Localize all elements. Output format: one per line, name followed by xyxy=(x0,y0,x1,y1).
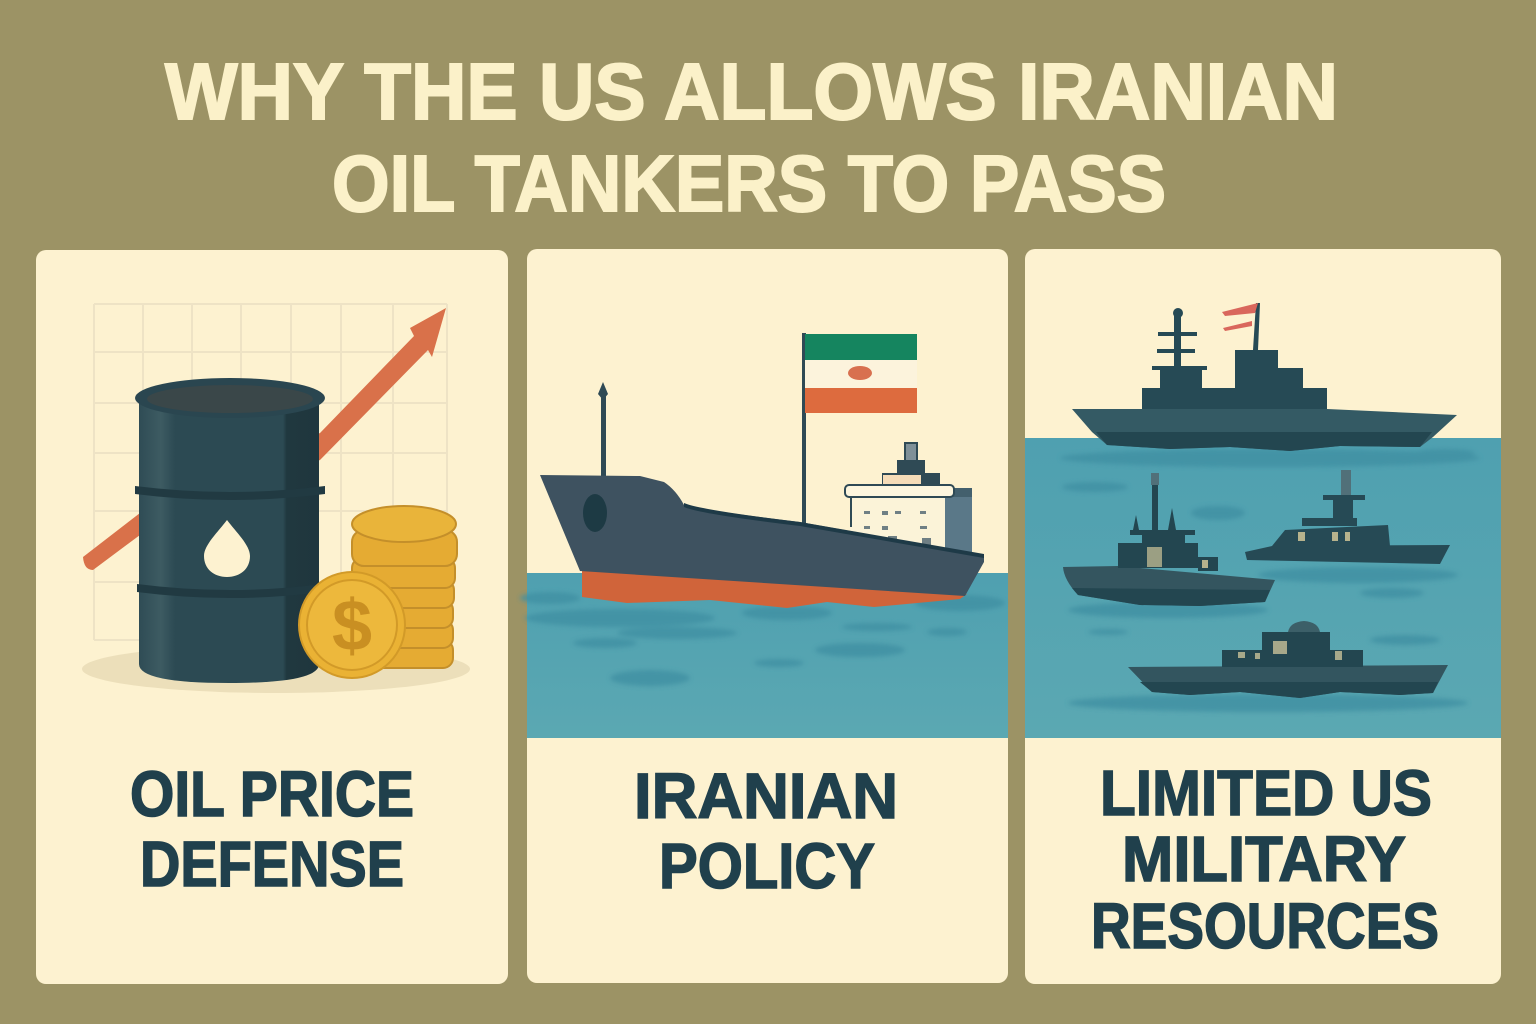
icon: dollar coin xyxy=(299,572,405,678)
label xyxy=(1091,757,1439,962)
label: OIL PRICE xyxy=(130,758,414,830)
icon: warship left xyxy=(1063,473,1275,606)
label: MILITARY xyxy=(1122,823,1406,895)
icon: large warship xyxy=(1072,303,1457,451)
sea xyxy=(527,573,1008,738)
icon: dollar coin: $ xyxy=(332,586,372,666)
title xyxy=(165,47,1338,228)
sea xyxy=(1025,438,1501,738)
label xyxy=(634,760,898,902)
icon: tanker hull xyxy=(540,382,984,608)
panel: limited us military resources xyxy=(1025,249,1501,984)
label: LIMITED US xyxy=(1100,757,1432,829)
title: WHY THE US ALLOWS IRANIAN xyxy=(165,47,1338,136)
label: RESOURCES xyxy=(1091,890,1439,962)
waves xyxy=(520,592,1005,686)
chart grid xyxy=(94,304,447,640)
panel: iranian policy xyxy=(520,249,1008,983)
icon: warship right xyxy=(1245,470,1450,564)
icon: flag xyxy=(802,333,917,528)
label: POLICY xyxy=(659,830,875,902)
icon: rising arrow xyxy=(83,308,446,570)
title: OIL TANKERS TO PASS xyxy=(332,139,1166,228)
icon: warship bottom xyxy=(1128,621,1448,698)
ground shadow xyxy=(82,645,470,693)
panel: oil price defense xyxy=(36,250,508,984)
waves xyxy=(1060,449,1480,712)
icon: ship superstructure xyxy=(845,443,972,557)
icon: coin stack xyxy=(352,506,457,668)
label: IRANIAN xyxy=(634,760,898,832)
label: DEFENSE xyxy=(140,828,404,900)
icon: oil barrel xyxy=(135,378,325,683)
label xyxy=(130,758,414,900)
